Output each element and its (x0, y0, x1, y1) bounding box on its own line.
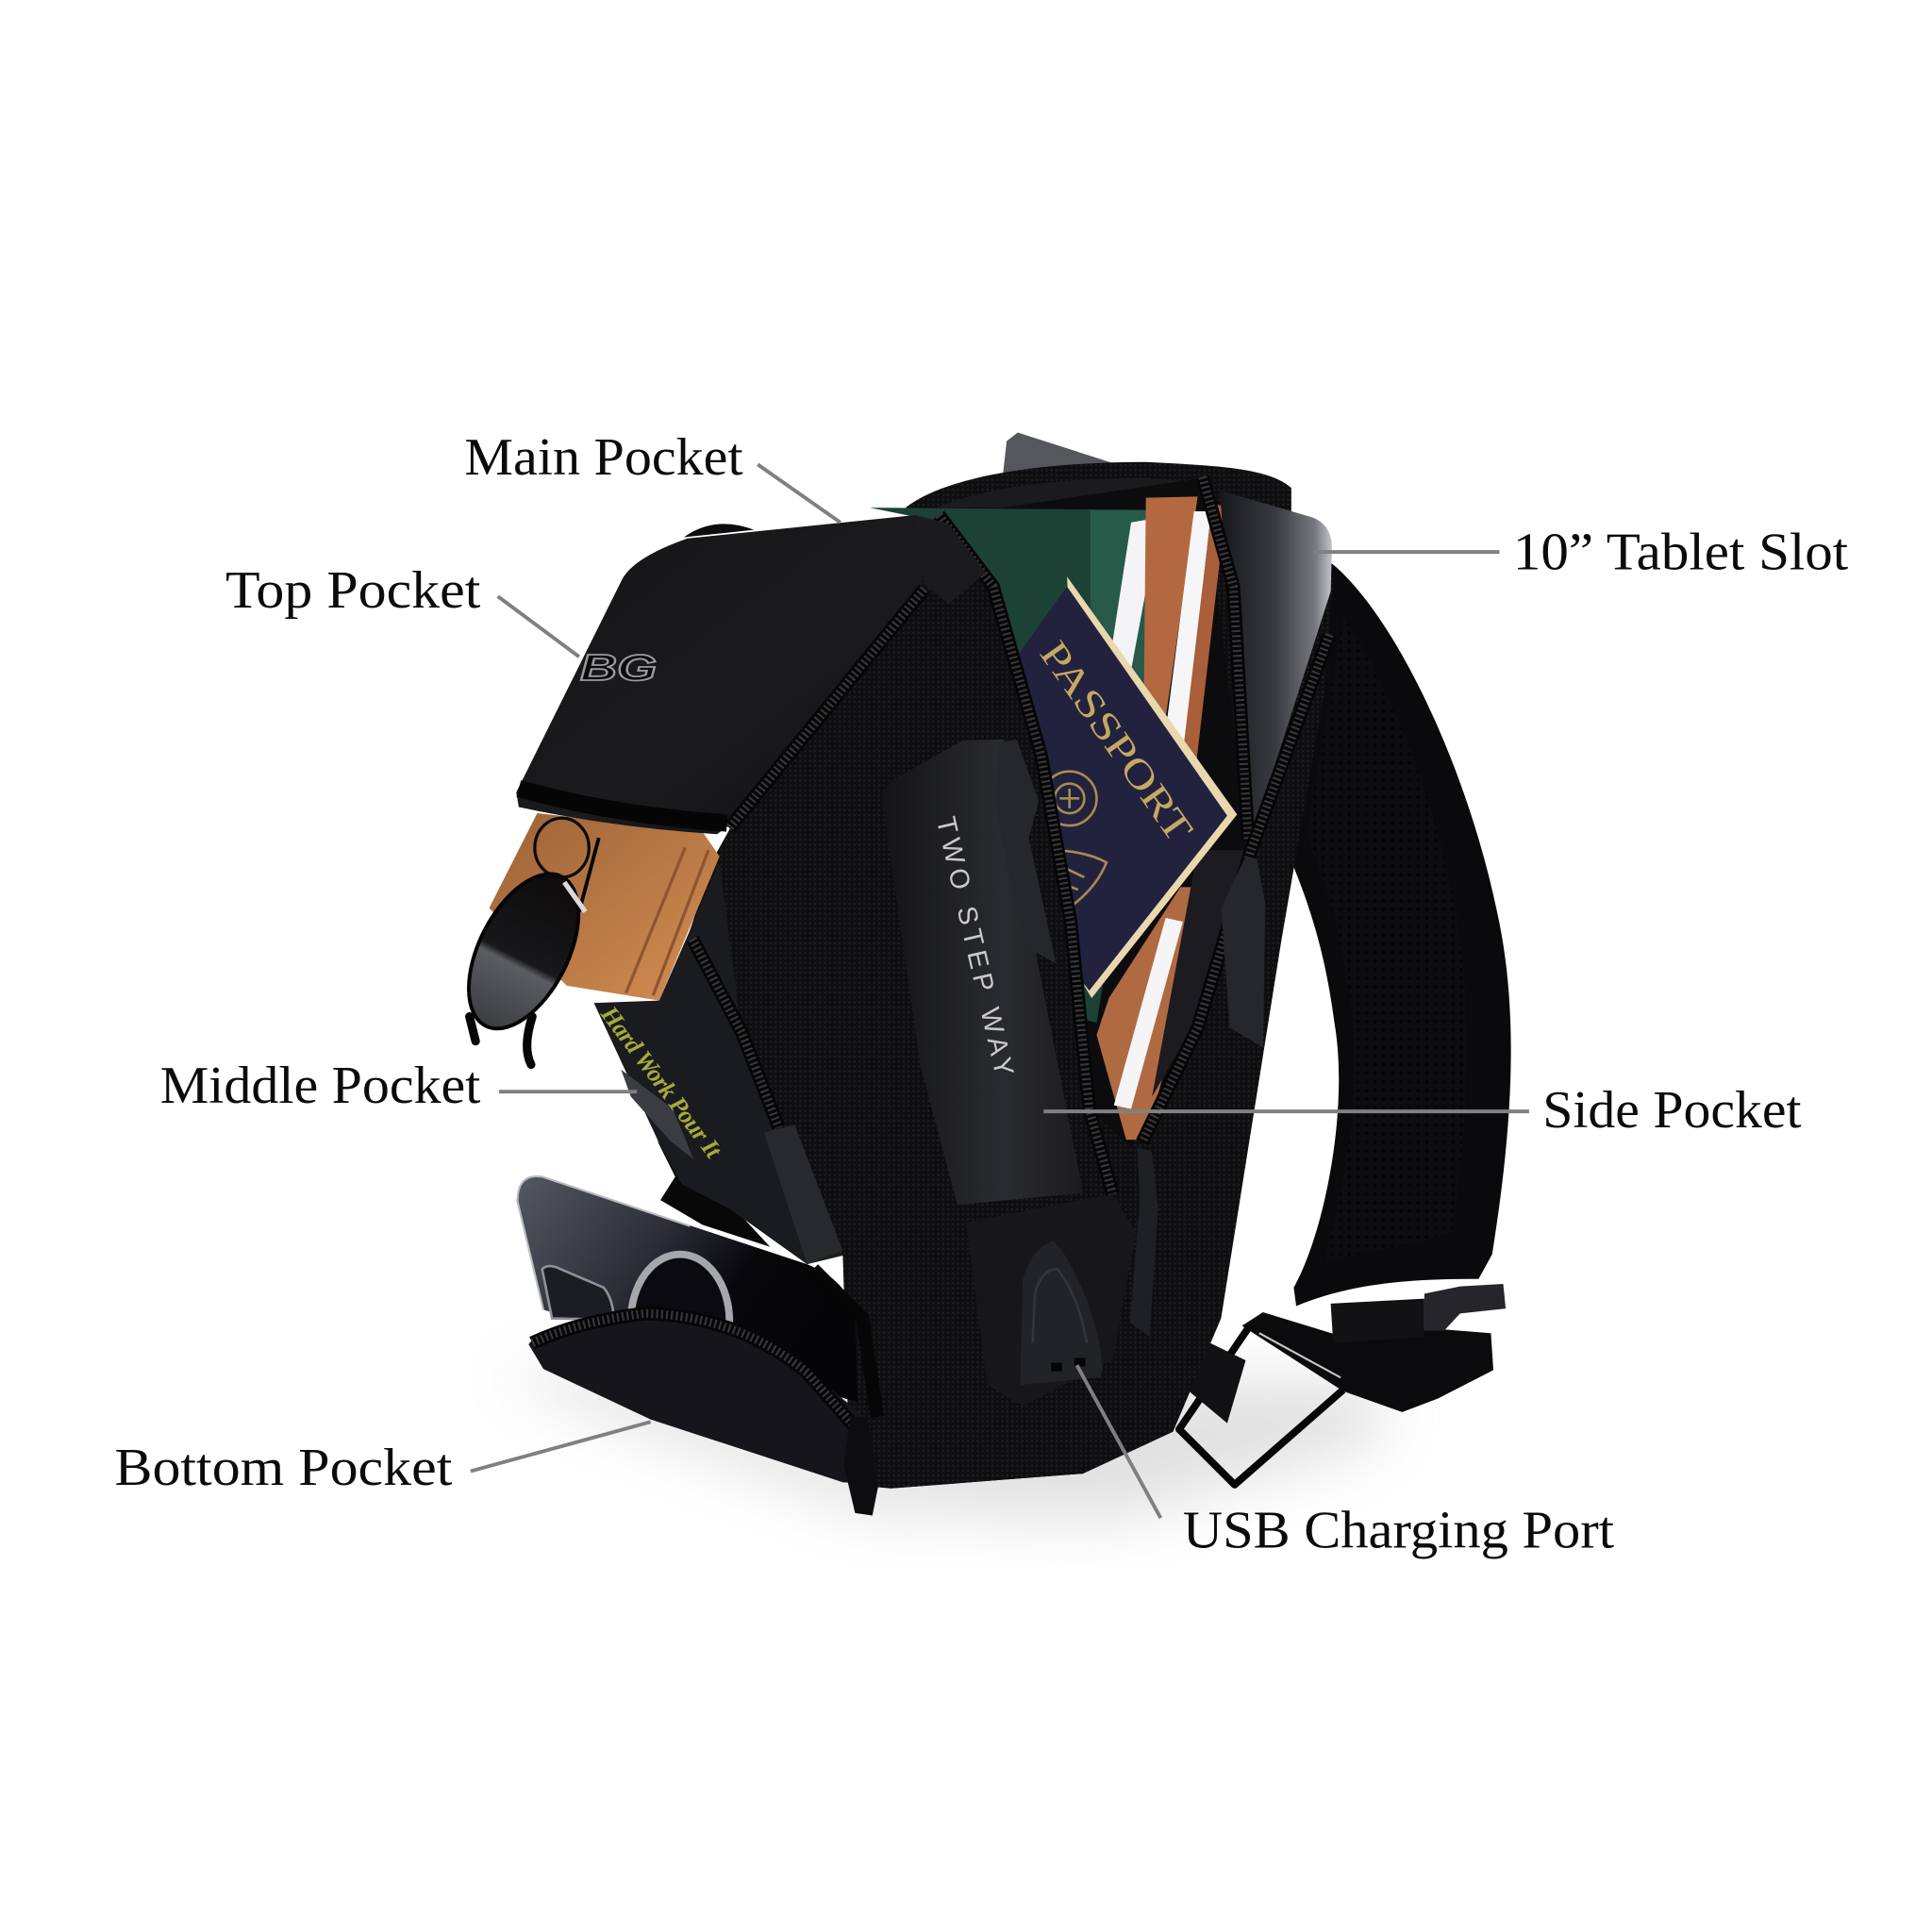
plastic buckle (1424, 1284, 1506, 1331)
label: main pocket: Main Pocket (464, 428, 743, 487)
lower webbing (1242, 1312, 1493, 1412)
pull: bottom pocket (844, 1417, 878, 1516)
strap mesh lining (1306, 616, 1467, 1263)
passport cover (1017, 587, 1227, 991)
pocket zip (692, 939, 778, 1127)
wallet (490, 813, 720, 1001)
bottom pocket pouch (528, 1269, 880, 1485)
label: bottom pocket: Bottom Pocket (114, 1439, 453, 1497)
pull: main pocket (995, 740, 1056, 963)
tablet front (1220, 491, 1332, 841)
pull: side pocket (1130, 1147, 1158, 1337)
lower white pages (1114, 918, 1183, 1109)
usb panel (966, 1194, 1136, 1406)
leader line: middle pocket (499, 1091, 637, 1093)
label: usb charging port: USB Charging Port (1183, 1501, 1614, 1559)
passport (1017, 576, 1237, 998)
sunglasses (446, 818, 601, 1064)
id window (621, 1070, 693, 1159)
leader line: usb charging port (1077, 1365, 1160, 1518)
panel base (966, 1194, 1136, 1406)
flap shell (516, 515, 943, 834)
top pocket ridge (684, 524, 754, 537)
port arc (1033, 1269, 1087, 1343)
wallet back layer (490, 813, 720, 1001)
label: tablet slot: 10” Tablet Slot (1513, 523, 1849, 581)
zipper pulls (844, 740, 1265, 1516)
books stack (870, 496, 1247, 1140)
pocket zip teeth (692, 939, 778, 1127)
pull: tablet slot (1221, 857, 1265, 1047)
passport title: PASSPORT (1031, 634, 1201, 850)
white pages B (1158, 511, 1211, 813)
pocket shell (594, 862, 842, 1264)
top opening lining (937, 478, 1201, 508)
black strap under pocket (657, 1140, 770, 1247)
flap side zip (729, 589, 924, 828)
label: top pocket: Top Pocket (225, 561, 481, 620)
zippers (939, 476, 1329, 1194)
ear tips (470, 1017, 532, 1064)
floor shadow (492, 1368, 1380, 1522)
flap bottom rim (519, 789, 727, 823)
leader line: main pocket (758, 464, 841, 523)
front nylon panel (672, 536, 1112, 1489)
tablet rear corner (1003, 432, 1122, 483)
label: side pocket: Side Pocket (1542, 1081, 1802, 1140)
frame loop (535, 818, 589, 877)
shoulder strap (1281, 560, 1511, 1306)
ring highlight (1259, 1333, 1341, 1377)
corner gusset (915, 515, 986, 604)
main compartment interior (937, 478, 1248, 1147)
nose pad (564, 882, 585, 912)
leader line: tablet slot (1313, 551, 1500, 554)
bag tab webbing (1183, 1340, 1245, 1424)
middle pocket (594, 862, 842, 1264)
passport emblem (1042, 772, 1107, 906)
flap side zip teeth (729, 589, 924, 828)
panel text: TWO STEP WAY (930, 814, 1019, 1079)
wallet edge (626, 848, 708, 995)
phone case edge (518, 1176, 690, 1309)
lower orange book section (1096, 887, 1214, 1140)
bg logo: BG (580, 648, 657, 689)
phone body (518, 1176, 858, 1402)
pocket lettering: Hard Work Pour It (595, 1000, 727, 1164)
bag body back silhouette (672, 462, 1333, 1489)
phone (518, 1176, 858, 1402)
label: middle pocket: Middle Pocket (160, 1057, 481, 1115)
upper webbing (1331, 1299, 1424, 1343)
frame arm (579, 838, 599, 912)
orange book cover A (1143, 496, 1198, 740)
two step way panel (882, 740, 1083, 1205)
passport pages (1067, 576, 1237, 998)
green notebook (870, 508, 1171, 1023)
triangular metal ring (1179, 1324, 1343, 1485)
lower interior lining (1152, 850, 1247, 1096)
lens (446, 857, 601, 1046)
pocket lower cuff (764, 1124, 842, 1264)
pouch zip teeth (532, 1313, 862, 1436)
camera bump (542, 1266, 613, 1320)
strap padding (1281, 560, 1511, 1306)
leader line: side pocket (1043, 1110, 1529, 1113)
leader line: bottom pocket (471, 1422, 651, 1472)
usb port housing (1020, 1241, 1103, 1385)
magsafe ring (631, 1255, 729, 1388)
leader line: top pocket (498, 596, 579, 657)
orange book cover B (1174, 503, 1226, 825)
strap webbing and buckles (1179, 1284, 1506, 1485)
phone side zip (813, 1269, 877, 1417)
grey panel (882, 740, 1083, 1205)
port slots (1051, 1357, 1086, 1372)
pouch body (528, 1309, 880, 1485)
white pages A (1109, 518, 1159, 690)
green notebook spine (1091, 510, 1171, 789)
top pocket flap (516, 515, 986, 834)
pouch zip (532, 1313, 862, 1436)
